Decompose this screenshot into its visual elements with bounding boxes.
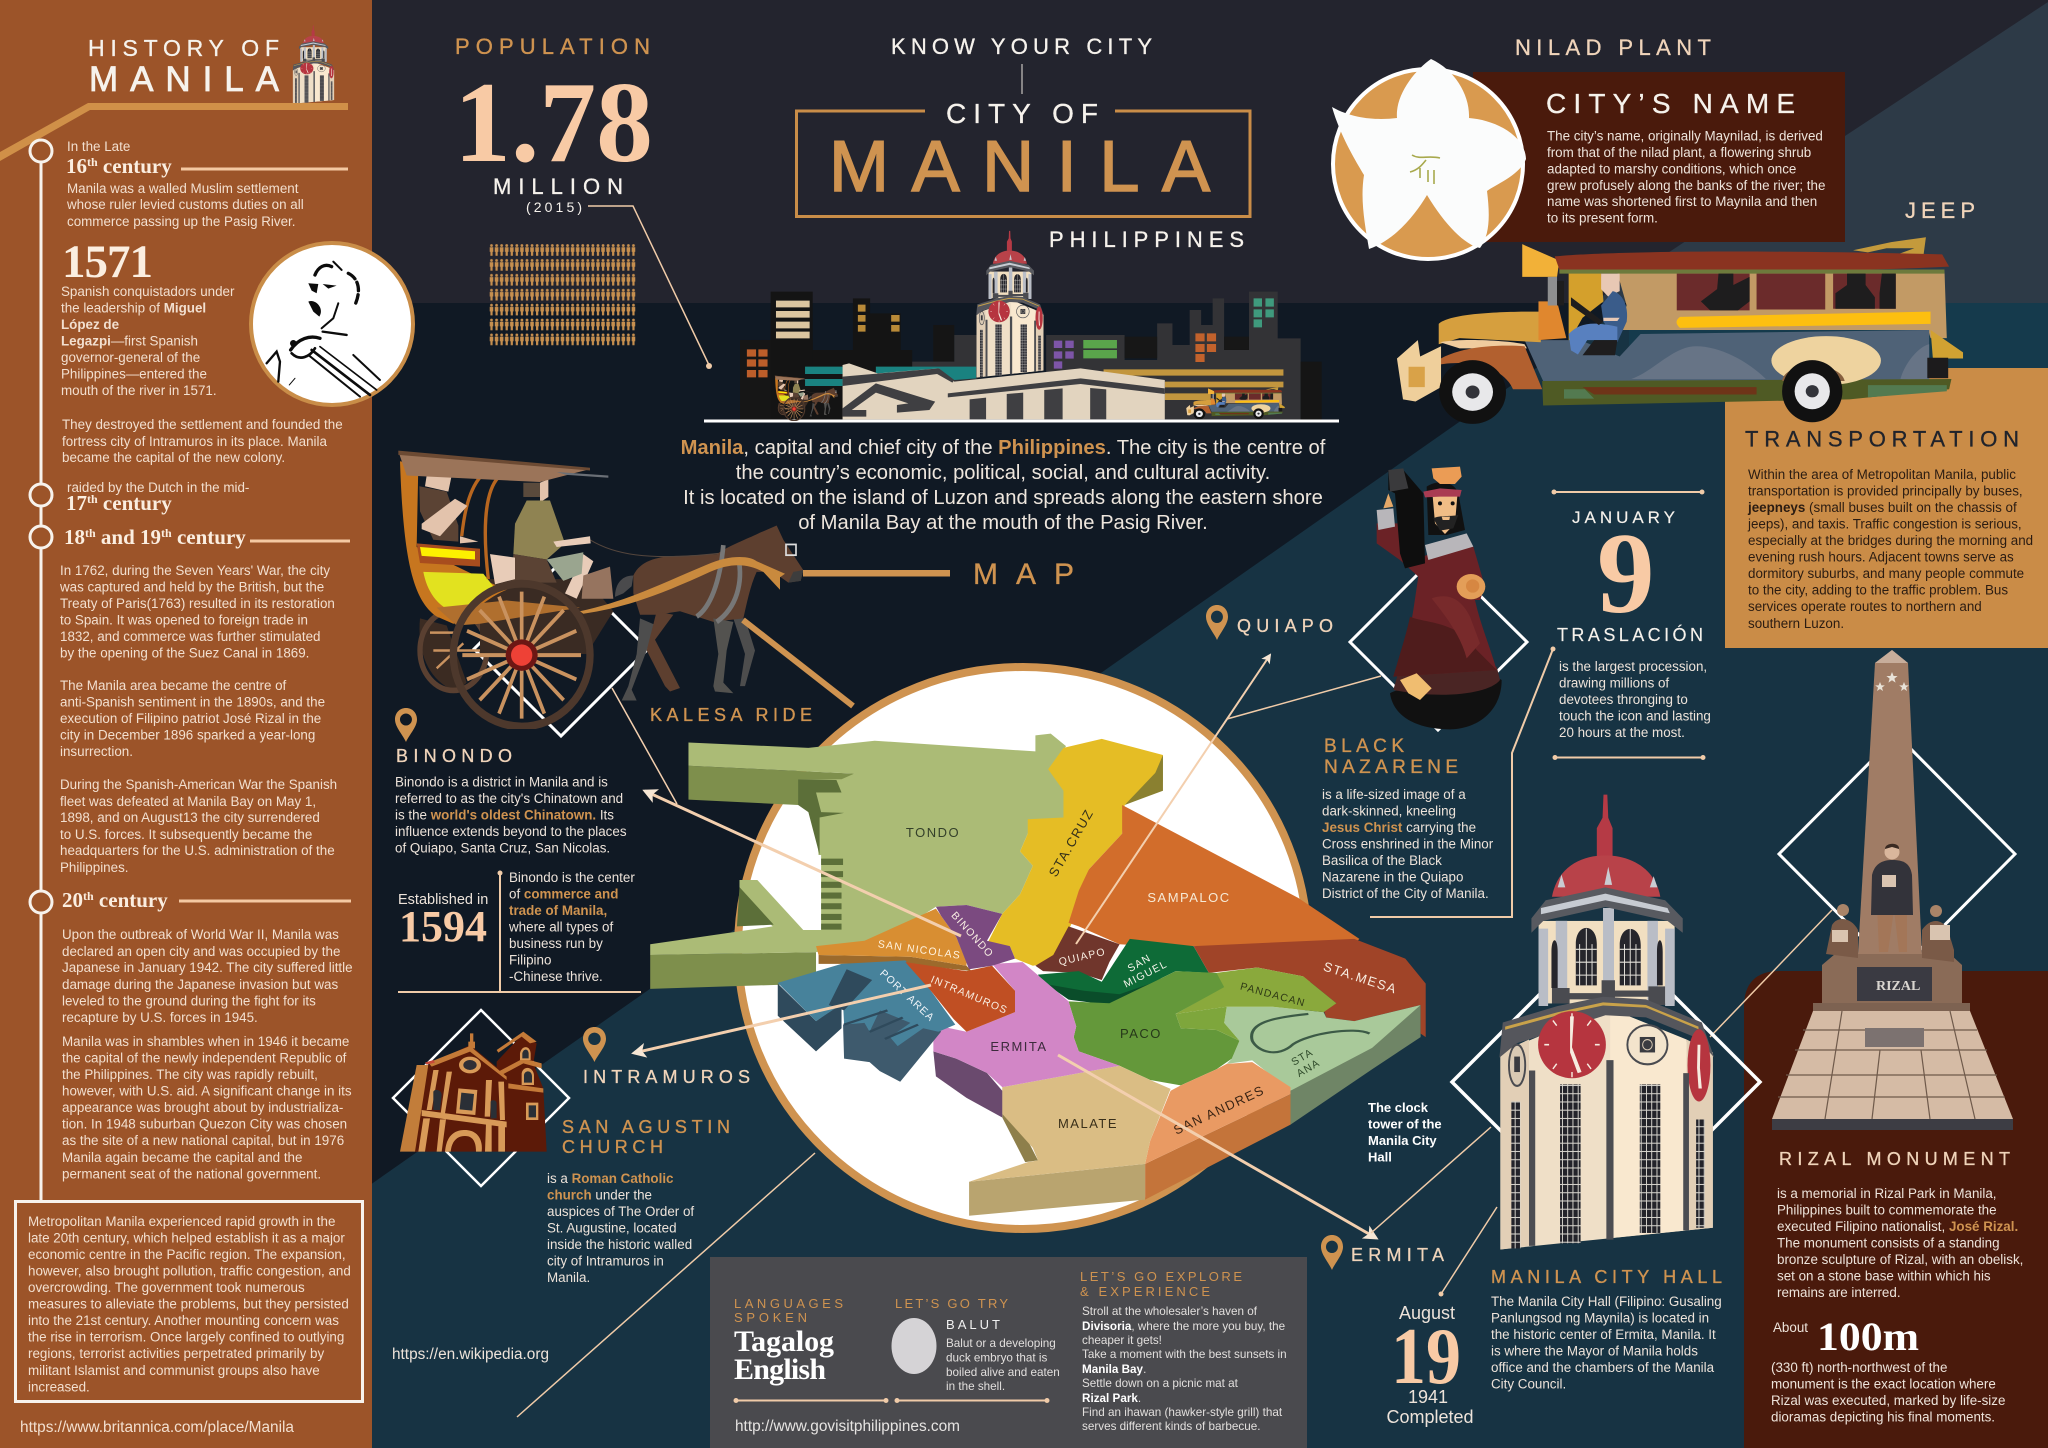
panel: city's name: adapted to marshy conditions, which once	[1547, 162, 1796, 176]
title: history of manila	[88, 35, 280, 99]
text: 20th century: appearance was brought about by industrializa-	[62, 1100, 343, 1115]
text: 20th century: Upon the outbreak of World War II, Manila was	[62, 927, 339, 942]
text: 20th century: damage during the Japanese invasion but was	[62, 977, 338, 992]
panel: rizal monument: (330 ft) north-northwest of the	[1771, 1360, 1947, 1375]
text: 20th century: Manila was in shambles when in 1946 it became	[62, 1034, 349, 1049]
text: 20th century: as the site of a new national capital, but in 1976	[62, 1133, 344, 1148]
section: intramuros church: INTRAMUROS	[583, 1067, 750, 1087]
section: binondo: trade of Manila,	[509, 903, 607, 918]
section: manila city hall: Completed	[1386, 1407, 1474, 1427]
panel: city's name: to its present form.	[1547, 210, 1658, 226]
panel: transportation: to the city, adding to the traffic problem. Bus	[1748, 582, 2008, 598]
text: late 16th century: In the Late	[67, 139, 130, 154]
section: manila city hall: ERMITA	[1351, 1245, 1444, 1265]
section: january 9 traslacion: drawing millions of	[1559, 676, 1669, 690]
section: manila city hall: is where the Mayor of Manila holds	[1491, 1344, 1698, 1358]
section: quiapo black nazarene: BLACK	[1324, 736, 1404, 757]
map district labels: STA	[1289, 1046, 1316, 1068]
map district labels: SAN	[1126, 952, 1153, 975]
panel: transportation: services operate routes to northern and	[1748, 599, 1982, 614]
panel: city's name: grew profusely along the banks of the river; the	[1547, 178, 1825, 193]
map district labels: QUIAPO	[1058, 946, 1107, 968]
connector: population to skyline	[588, 206, 712, 369]
text: 1571	[61, 236, 343, 465]
text: 18th and 19th century: Philippines.	[60, 860, 128, 875]
panel: languages, food, experience: Rizal Park.	[1082, 1392, 1141, 1405]
panel: city's name: from that of the nilad plant, a flowering shrub	[1547, 145, 1811, 160]
callout: metropolitan manila: economic centre in the Pacific region. The expansion,	[28, 1247, 346, 1262]
text: intro paragraph: the country’s economic, political, social, and cultural activity.	[736, 462, 1270, 484]
panel: transportation: Within the area of Metropolitan Manila, public	[1748, 467, 2016, 482]
panel: languages, food, experience: LET’S GO EXPLORE	[1080, 1269, 1242, 1284]
text: 18th and 19th century: In 1762, during the Seven Years' War, the city	[60, 563, 330, 578]
map district labels: STA.CRUZ	[1046, 806, 1097, 879]
section: intramuros church: church under the	[547, 1188, 652, 1202]
icon: small jeepney	[1186, 387, 1285, 419]
icon: quiapo pin	[1206, 605, 1228, 640]
map district labels: BINONDO	[949, 910, 996, 960]
text: 20th century: leveled to the ground during the fight for its	[62, 994, 316, 1008]
illustration: rizal monument: RIZAL	[1876, 979, 1920, 994]
section: january 9 traslacion: 9	[1597, 510, 1654, 637]
panel: languages, food, experience: & EXPERIENCE	[1080, 1284, 1210, 1299]
section: binondo	[395, 708, 641, 992]
section: quiapo black nazarene: NAZARENE	[1324, 757, 1458, 778]
heading: population: MILLION	[493, 174, 623, 199]
panel: languages, food, experience: Take a moment with the best sunsets in	[1082, 1348, 1287, 1361]
text: 18th and 19th century: fleet was defeated at Manila Bay on May 1,	[60, 794, 316, 809]
icon: nilad flower	[1332, 59, 1526, 259]
text: 18th and 19th century: th	[161, 526, 172, 540]
text: 20th century: Manila again became the capital and the	[62, 1150, 302, 1165]
section: quiapo black nazarene: is a life-sized image of a	[1322, 787, 1466, 802]
panel: transportation	[1725, 368, 2048, 648]
map district labels: INTRAMUROS	[929, 974, 1010, 1017]
section: binondo: Established in	[398, 892, 488, 908]
panel: languages, food, experience: LANGUAGES	[734, 1296, 843, 1311]
panel: languages, food, experience: Divisoria, where the more you buy, the	[1082, 1320, 1285, 1333]
text: 18th and 19th century: Treaty of Paris(1763) resulted in its restoration	[60, 596, 335, 611]
section: binondo: influence extends beyond to the places	[395, 824, 627, 839]
panel: transportation: dormitory suburbs, and many people commute	[1748, 566, 2024, 581]
text: 17th century: raided by the Dutch in the mid-	[67, 480, 249, 495]
text: 1571: became the capital of the new colony.	[62, 450, 285, 465]
section: binondo: 1594	[399, 902, 487, 951]
text: 18th and 19th century: execution of Filipino patriot José Rizal in the	[60, 711, 321, 726]
panel: languages, food, experience: Tagalog	[734, 1325, 834, 1358]
icon: clock tower	[293, 25, 334, 104]
section: binondo: of Quiapo, Santa Cruz, San Nicolas.	[395, 840, 610, 856]
section: manila city hall: 1941	[1408, 1387, 1448, 1407]
panel: transportation: jeeps), and taxis. Traffic congestion is serious,	[1747, 516, 2022, 532]
text: 18th and 19th century: During the Spanish-American War the Spanish	[60, 777, 337, 792]
section: manila city hall: The clock	[1368, 1100, 1429, 1115]
text: 20th century: recapture by U.S. forces in 1945.	[62, 1010, 258, 1025]
text: 1571: mouth of the river in 1571.	[61, 383, 217, 398]
text: 20th century: the Philippines. The city was rapidly rebuilt,	[62, 1067, 318, 1082]
panel: languages, food, experience: boiled alive and eaten	[946, 1366, 1060, 1379]
text: 1571: Philippines—entered the	[61, 366, 207, 382]
section: manila city hall: MANILA CITY HALL	[1491, 1267, 1722, 1287]
text: 17th century: century	[98, 491, 172, 515]
title block: KNOW YOUR CITY	[891, 34, 1152, 59]
section: intramuros church: auspices of The Order of	[547, 1204, 694, 1219]
section: manila city hall: The Manila City Hall (Filipino: Gusaling	[1491, 1294, 1722, 1309]
map district labels: PACO	[1120, 1026, 1162, 1041]
heading: population	[454, 34, 653, 215]
text: 18th and 19th century: insurrection.	[60, 744, 133, 759]
heading: nilad plant: NILAD PLANT	[1515, 35, 1711, 60]
illustration: city hall clock tower	[1499, 795, 1714, 1249]
big number 1.78: 1.78	[454, 59, 653, 186]
section: manila city hall: tower of the	[1368, 1116, 1442, 1132]
icon: small tower	[976, 231, 1044, 378]
panel: rizal monument: bronze sculpture of Rizal, with an obelisk,	[1777, 1252, 2023, 1267]
section: binondo: is the world's oldest Chinatown. Its	[395, 808, 614, 822]
heading: map: MAP	[973, 558, 1074, 591]
panel: languages, food, experience: Stroll at the wholesaler’s haven of	[1082, 1305, 1258, 1318]
section: quiapo black nazarene	[1206, 467, 1556, 917]
panel: languages, food, experience: cheaper it gets!	[1082, 1334, 1162, 1347]
arrow: quiapo	[1076, 655, 1270, 944]
section: intramuros church: is a Roman Catholic	[547, 1171, 674, 1186]
section: binondo: BINONDO	[396, 746, 512, 766]
text: 18th and 19th century: The Manila area became the centre of	[60, 678, 287, 693]
title block	[796, 34, 1250, 252]
text: late 16th century	[66, 139, 348, 229]
text: 18th and 19th century: was captured and held by the British, but the	[59, 580, 324, 594]
text: 1571: They destroyed the settlement and founded the	[62, 417, 343, 432]
map district labels	[877, 806, 1399, 1138]
section: manila city hall: office and the chambers of the Manila	[1491, 1360, 1715, 1375]
text: intro paragraph: of Manila Bay at the mouth of the Pasig River.	[798, 512, 1208, 534]
panel: rizal monument: dioramas depicting his final moments.	[1771, 1410, 1995, 1424]
panel: languages, food, experience: LET’S GO TRY	[895, 1296, 1008, 1311]
section: january 9 traslacion: is the largest procession,	[1559, 659, 1707, 674]
map	[650, 667, 1426, 1229]
panel: city's name: The city’s name, originally Maynilad, is derived	[1547, 128, 1823, 144]
text: 18th and 19th century: 1898, and on August13 the city surrendered	[60, 810, 320, 825]
text: 20th century: 20	[62, 888, 83, 912]
section: quiapo black nazarene: Cross enshrined in the Minor	[1322, 836, 1494, 852]
text: 18th and 19th century: 1832, and commerce was further stimulated	[60, 629, 320, 644]
decorative connector to map ring	[743, 620, 853, 706]
section: binondo: where all types of	[508, 920, 613, 934]
map district labels: SAN NICOLAS	[877, 938, 962, 962]
text: 20th century: Japanese in January 1942. The city suffered little	[62, 960, 353, 975]
text: 1571: López de	[61, 317, 119, 332]
chart: population pictogram	[489, 244, 636, 348]
text: intro paragraph: It is located on the island of Luzon and spreads along the eastern shore	[683, 487, 1323, 509]
section: binondo: referred to as the city's Chinatown and	[395, 791, 623, 806]
panel: history sidebar	[0, 0, 372, 1448]
callout: metropolitan manila: however, also brought pollution, traffic congestion, and	[28, 1264, 351, 1278]
source link: britannica: https://www.britannica.com/place/Manila	[20, 1419, 294, 1436]
icon: san agustin church	[400, 1032, 547, 1152]
illustration: jeepney	[1397, 237, 1963, 424]
icon: ermita pin	[1321, 1235, 1343, 1270]
text: 1571: Spanish conquistadors under	[61, 284, 235, 299]
map district labels: PANDACAN	[1239, 981, 1307, 1010]
text: intro paragraph	[681, 437, 1326, 534]
heading: jeep: JEEP	[1905, 198, 1975, 223]
skyline	[704, 231, 1339, 422]
text: 1571: 1571	[62, 236, 153, 288]
callout: metropolitan manila: regions, terrorist activities perpetrated primarily by	[28, 1346, 324, 1361]
timeline	[30, 140, 52, 1202]
section: binondo: Binondo is the center	[509, 870, 635, 885]
text: 18th and 19th century: century	[172, 525, 246, 549]
text: 20th century: the capital of the newly independent Republic of	[62, 1050, 347, 1066]
text: 20th century: th	[83, 889, 94, 903]
panel: languages, food, experience	[710, 1257, 1307, 1448]
section: manila city hall: Hall	[1368, 1150, 1392, 1164]
section: quiapo black nazarene: District of the City of Manila.	[1322, 886, 1489, 901]
map district labels: STA.MESA	[1322, 959, 1399, 997]
panel: rizal monument	[1710, 650, 2048, 1448]
panel: rizal monument: executed Filipino nationalist, José Rizal.	[1777, 1219, 2018, 1234]
panel: languages, food, experience: SPOKEN	[734, 1310, 807, 1325]
text: late 16th century: commerce passing up the Pasig River.	[67, 214, 296, 229]
text: late 16th century: Manila was a walled Muslim settlement	[67, 181, 299, 196]
illustration: black nazarene	[1377, 467, 1502, 729]
section: manila city hall: August	[1399, 1303, 1455, 1323]
map district labels: PORT AREA	[877, 967, 937, 1024]
icon: intramuros pin	[583, 1027, 606, 1062]
text: 1571: governor-general of the	[61, 350, 200, 365]
panel: rizal monument: The monument consists of a standing	[1777, 1236, 2000, 1250]
title block: CITY OF	[946, 98, 1098, 129]
text: 18th and 19th century: anti-Spanish sentiment in the 1890s, and the	[60, 694, 325, 710]
panel: languages, food, experience: BALUT	[946, 1317, 1000, 1332]
heading: population: (2015)	[526, 199, 582, 215]
section: january 9 traslacion: touch the icon and lasting	[1559, 708, 1711, 724]
panel: transportation: southern Luzon.	[1748, 616, 1844, 631]
text: 18th and 19th century: headquarters for the U.S. administration of the	[60, 843, 335, 858]
section: intramuros church: Manila.	[547, 1270, 590, 1285]
panel: rizal monument: About	[1773, 1320, 1808, 1335]
text: 20th century: declared an open city and was occupied by the	[62, 944, 340, 959]
panel: transportation: especially at the bridges during the morning and	[1748, 533, 2033, 548]
text: late 16th century: 16	[66, 154, 87, 178]
section: manila city hall: Manila City	[1368, 1133, 1437, 1148]
illustration: kalesa ride	[398, 451, 812, 736]
section: manila city hall: 19	[1391, 1311, 1461, 1401]
section: quiapo black nazarene: Nazarene in the Quiapo	[1322, 870, 1463, 884]
title block: MANILA	[829, 127, 1210, 207]
panel: rizal monument: RIZAL MONUMENT	[1779, 1149, 2010, 1169]
section: intramuros church: St. Augustine, located	[547, 1220, 677, 1236]
callout: metropolitan manila: increased.	[28, 1380, 90, 1394]
panel: city's name: name was shortened first to Maynila and then	[1547, 194, 1817, 209]
title block: PHILIPPINES	[1049, 227, 1244, 252]
title: history of manila: HISTORY OF	[88, 35, 279, 61]
panel: rizal monument: set on a stone base within which his	[1777, 1268, 1991, 1284]
panel: transportation: TRANSPORTATION	[1745, 426, 2019, 452]
text: 18th and 19th century: to U.S. forces. It subsequently became the	[60, 827, 312, 842]
ground line	[704, 420, 1339, 422]
section: manila city hall: City Council.	[1491, 1376, 1566, 1392]
section: intramuros church	[393, 1010, 750, 1285]
text: late 16th century: th	[87, 155, 98, 169]
panel: languages, food, experience: Find an ihawan (hawker-style grill) that	[1082, 1406, 1283, 1419]
callout: metropolitan manila: Metropolitan Manila experienced rapid growth in the	[28, 1214, 335, 1229]
section: binondo: of commerce and	[509, 886, 618, 902]
callout: metropolitan manila: into the 21st century. Another mounting concern was	[28, 1313, 339, 1328]
section: manila city hall: the historic center of Ermita, Manila. It	[1491, 1327, 1716, 1342]
section: quiapo black nazarene: Basilica of the Black	[1322, 853, 1442, 868]
panel: rizal monument: is a memorial in Rizal Park in Manila,	[1777, 1186, 1997, 1201]
arrow: intramuros	[634, 985, 931, 1053]
section: manila city hall: Panlungsod ng Maynila) is located in	[1491, 1310, 1709, 1326]
heading: population: POPULATION	[455, 34, 650, 59]
text: 18th and 19th century: by the opening of the Suez Canal in 1869.	[60, 646, 309, 660]
text: 18th and 19th century: th	[85, 526, 96, 540]
panel: languages, food, experience: in the shell.	[946, 1380, 1005, 1393]
panel: rizal monument: 100m	[1817, 1314, 1919, 1359]
icon: legazpi portrait	[251, 243, 413, 405]
text: 1571: the leadership of Miguel	[61, 300, 206, 316]
text: 18th and 19th century: to Spain. It was opened to foreign trade in	[60, 612, 308, 628]
icon: balut egg	[892, 1318, 936, 1374]
panel: languages, food, experience: http://www.govisitphilippines.com	[735, 1418, 960, 1435]
title frame	[796, 111, 1250, 216]
text: 1571: Legazpi—first Spanish	[61, 334, 198, 348]
illustration: rizal monument	[1772, 650, 2013, 1130]
map district labels: TONDO	[906, 825, 960, 840]
section: january 9 traslacion	[1552, 490, 1711, 760]
text: intro paragraph: Manila, capital and chief city of the Philippines. The city is the centre of	[681, 437, 1326, 459]
panel: rizal monument: Rizal was executed, marked by life-size	[1771, 1393, 2005, 1408]
section: manila city hall	[1321, 795, 1760, 1427]
section: binondo: Filipino	[509, 952, 551, 968]
arrow: ermita	[1058, 1055, 1376, 1238]
text: 17th century	[66, 480, 249, 515]
connector: long diagonal	[517, 1153, 815, 1417]
callout: metropolitan manila: overcrowding. The government took numerous	[28, 1280, 305, 1295]
section: binondo: business run by	[509, 936, 603, 951]
callout: metropolitan manila: militant Islamist and communist groups also have	[28, 1363, 320, 1378]
section: quiapo black nazarene: dark-skinned, kneeling	[1322, 804, 1456, 818]
text: 18th and 19th century: and 19	[96, 525, 161, 549]
panel: transportation: jeepneys (small buses built on the chassis of	[1747, 500, 2017, 515]
panel: languages, food, experience: Manila Bay.	[1082, 1363, 1146, 1376]
section: intramuros church: city of Intramuros in	[547, 1254, 664, 1268]
section: quiapo black nazarene: Jesus Christ carrying the	[1322, 820, 1476, 835]
panel: transportation: evening rush hours. Adjacent towns serve as	[1748, 550, 2014, 564]
text: 20th century	[62, 888, 353, 1182]
text: late 16th century: century	[98, 154, 172, 178]
panel: rizal monument: monument is the exact location where	[1771, 1376, 1996, 1392]
text: 20th century: century	[94, 888, 168, 912]
text: 17th century: 17	[66, 491, 87, 515]
arrow: binondo	[645, 791, 961, 936]
section: intramuros church: CHURCH	[562, 1137, 663, 1157]
map district labels: ANA	[1295, 1057, 1322, 1080]
illustration: kalesa ride: KALESA RIDE	[650, 705, 812, 725]
panel: languages, food, experience: duck embryo that is	[946, 1352, 1047, 1364]
panel: languages, food, experience: Settle down on a picnic mat at	[1082, 1377, 1239, 1390]
panel: city's name: CITY’S NAME	[1546, 88, 1795, 119]
section: january 9 traslacion: TRASLACIÓN	[1557, 624, 1703, 645]
map district labels: MIGUEL	[1122, 958, 1170, 990]
text: 18th and 19th century: 18	[64, 525, 85, 549]
section: intramuros church: SAN AGUSTIN	[562, 1117, 730, 1137]
callout: metropolitan manila: measures to alleviate the problems, but they persisted	[28, 1296, 349, 1312]
panel: rizal monument: remains are interred.	[1777, 1285, 1901, 1300]
text: 1571: fortress city of Intramuros in its place. Manila	[62, 434, 327, 449]
panel: transportation: transportation is provided principally by buses,	[1748, 484, 2023, 498]
map district labels: SAMPALOC	[1147, 890, 1231, 905]
panel: languages, food, experience: English	[734, 1353, 826, 1386]
callout: metropolitan manila	[16, 1202, 362, 1402]
text: 17th century: th	[87, 492, 98, 506]
source link: wikipedia: https://en.wikipedia.org	[392, 1346, 549, 1363]
connector: binondo kalesa line	[612, 688, 677, 804]
text: 18th and 19th century: city in December 1896 sparked a year-long	[60, 728, 315, 742]
title: history of manila: MANILA	[89, 60, 280, 99]
callout: metropolitan manila: late 20th century, which helped establish it as a major	[28, 1230, 345, 1246]
panel: rizal monument: Philippines built to commemorate the	[1777, 1202, 1997, 1218]
panel: languages, food, experience: serves different kinds of barbecue.	[1082, 1420, 1260, 1433]
icon: small kalesa	[775, 376, 838, 421]
panel: languages, food, experience: Balut or a developing	[946, 1337, 1056, 1350]
map district labels: MALATE	[1058, 1116, 1118, 1131]
map district labels: SAN ANDRES	[1171, 1082, 1267, 1138]
section: binondo: -Chinese thrive.	[509, 969, 603, 984]
section: january 9 traslacion: 20 hours at the most.	[1559, 725, 1685, 740]
panel: city's name	[1473, 72, 1845, 242]
heading: map	[803, 558, 1074, 591]
map district labels: ERMITA	[990, 1039, 1048, 1054]
section: binondo: Binondo is a district in Manila and is	[395, 774, 608, 790]
text: 18th and 19th century	[59, 525, 350, 875]
section: intramuros church: inside the historic walled	[547, 1237, 692, 1252]
text: late 16th century: whose ruler levied customs duties on all	[66, 197, 304, 212]
section: january 9 traslacion: devotees thronging to	[1559, 692, 1688, 707]
decorative timeline header line	[0, 103, 348, 161]
text: 20th century: tion. In 1948 suburban Quezon City was chosen	[62, 1116, 347, 1132]
section: january 9 traslacion: JANUARY	[1572, 508, 1675, 527]
callout: metropolitan manila: the rise in terrorism. Once largely confined to outlying	[28, 1330, 344, 1344]
icon: binondo pin	[395, 708, 417, 742]
text: 20th century: however, with U.S. aid. A significant change in its	[62, 1084, 352, 1098]
section: quiapo black nazarene: QUIAPO	[1237, 616, 1333, 636]
text: 20th century: permanent seat of the national government.	[62, 1166, 321, 1182]
